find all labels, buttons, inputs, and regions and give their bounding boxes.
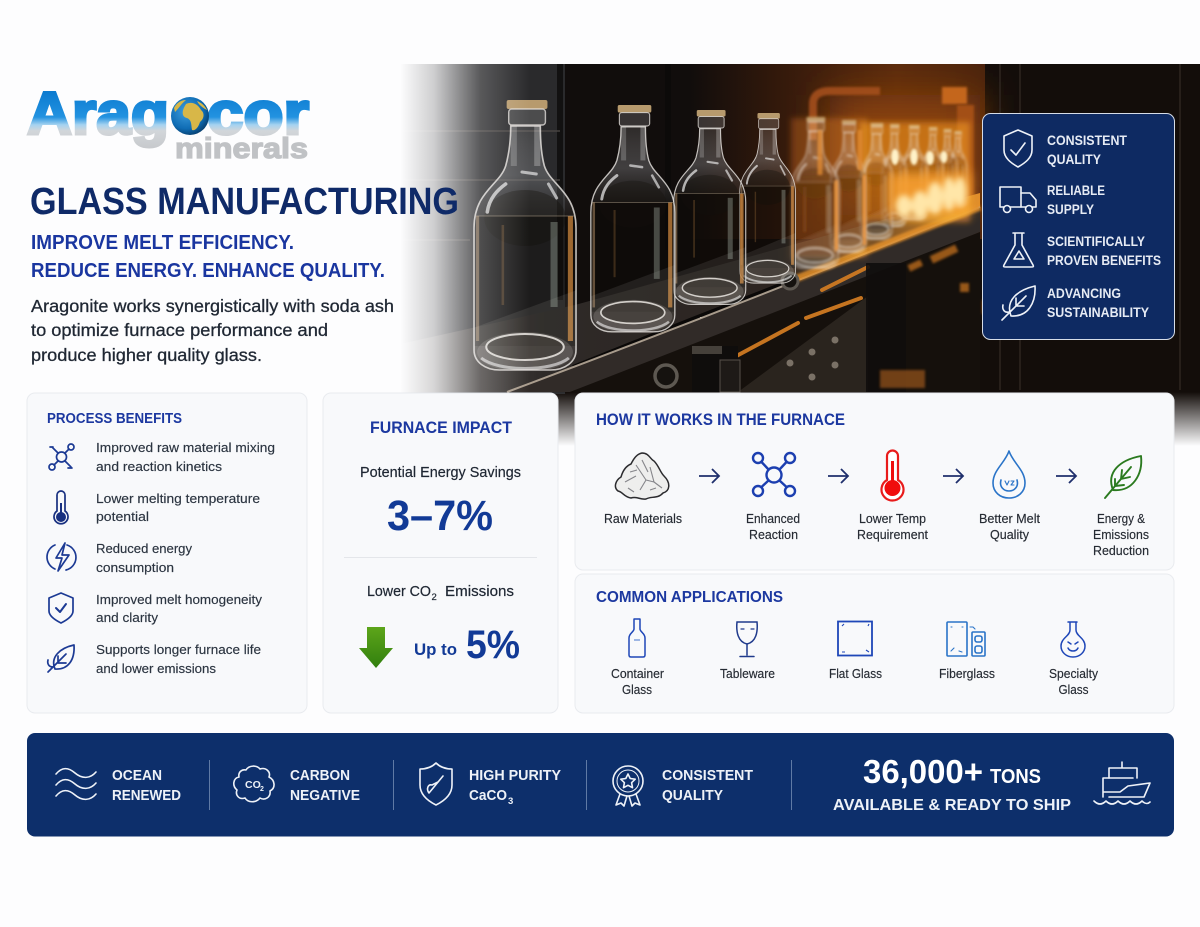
panel: how it works xyxy=(575,393,1174,570)
intro text: to optimize furnace performance and xyxy=(31,320,328,340)
text: carbon negative xyxy=(290,768,360,804)
icon: thermometer xyxy=(54,491,68,524)
text: lower temp xyxy=(857,512,929,542)
label: lower CO2: 2 xyxy=(432,592,437,603)
text: homogeneity: and clarity xyxy=(96,610,159,625)
text: scientifically proven benefits: PROVEN BENEFITS xyxy=(1047,253,1161,268)
text: better melt: Quality xyxy=(990,528,1030,542)
text: melting: potential xyxy=(96,509,149,524)
text: container glass: Glass xyxy=(622,683,652,697)
label: lower CO2 xyxy=(367,584,514,603)
text: high purity: HIGH PURITY xyxy=(469,768,561,784)
icon: leaf xyxy=(48,645,74,672)
heading: how it works: HOW IT WORKS IN THE FURNACE xyxy=(596,411,845,429)
text: tableware: Tableware xyxy=(720,667,775,681)
text: advancing sustainability: ADVANCING xyxy=(1047,286,1121,301)
icon: CO2 cloud: 2 xyxy=(260,786,264,793)
text: energy xyxy=(96,541,192,575)
icon: ship xyxy=(1094,762,1150,804)
icon: fiberglass xyxy=(947,622,985,656)
text: enhanced reaction: Reaction xyxy=(749,528,798,542)
panel: process benefits xyxy=(27,393,307,713)
text: consistent quality: CONSISTENT xyxy=(1047,133,1128,148)
icon: award medal xyxy=(613,766,643,806)
text: high purity: CaCO xyxy=(469,788,507,804)
text: reliable supply xyxy=(1047,183,1105,217)
text: carbon negative: CARBON xyxy=(290,768,350,784)
text: available: AVAILABLE & READY TO SHIP xyxy=(833,797,1071,814)
text: fiberglass: Fiberglass xyxy=(939,667,995,681)
arrow xyxy=(699,469,719,483)
icon: leaf xyxy=(1002,286,1035,320)
icon: red thermometer xyxy=(882,451,904,501)
icon: purity shield xyxy=(420,763,452,805)
intro text: Aragonite works synergistically with soda ash xyxy=(31,296,394,316)
text: homogeneity xyxy=(96,592,263,625)
logo: Aragocor Minerals: minerals xyxy=(175,133,308,165)
icon: green down arrow xyxy=(359,627,393,668)
text: reliable supply: SUPPLY xyxy=(1047,202,1094,217)
far glowing bottles xyxy=(860,123,967,240)
arrow xyxy=(1056,469,1076,483)
stat: 36,000+ tons xyxy=(863,753,1041,790)
text: reliable supply: RELIABLE xyxy=(1047,183,1105,198)
text: melting: Lower melting temperature xyxy=(96,491,260,506)
text: specialty glass: Specialty xyxy=(1049,667,1099,681)
text: consistent quality xyxy=(1047,133,1128,167)
text: consistent quality: QUALITY xyxy=(662,788,723,804)
subtitle xyxy=(31,232,385,282)
text: carbon negative: NEGATIVE xyxy=(290,788,360,804)
subtitle: IMPROVE MELT EFFICIENCY. xyxy=(31,232,294,254)
near bottles xyxy=(473,100,796,372)
text: ocean renewed xyxy=(112,768,181,804)
icon: wine glass xyxy=(737,622,757,656)
icon: bottle xyxy=(629,619,645,657)
stat: 36,000+ tons: TONS xyxy=(990,766,1041,788)
icon: truck xyxy=(1000,187,1036,212)
arrow xyxy=(943,469,963,483)
text: enhanced reaction: Enhanced xyxy=(746,512,800,526)
text: lower temp: Requirement xyxy=(857,528,929,542)
text: energy: consumption xyxy=(96,560,174,575)
text: consistent quality: QUALITY xyxy=(1047,152,1101,167)
icon: melt drop xyxy=(993,451,1025,498)
heading: process benefits: PROCESS BENEFITS xyxy=(47,411,182,427)
icon: flask xyxy=(1004,233,1033,267)
subtitle: REDUCE ENERGY. ENHANCE QUALITY. xyxy=(31,260,385,282)
text: energy reduction xyxy=(1093,512,1149,558)
arrow xyxy=(828,469,848,483)
title: GLASS MANUFACTURING xyxy=(30,181,459,223)
label: up to: Up to xyxy=(414,640,457,659)
text: mixing: and reaction kinetics xyxy=(96,459,223,474)
text: scientifically proven benefits: SCIENTIFICALLY xyxy=(1047,234,1145,249)
logo: Aragocor Minerals: Arag xyxy=(27,80,169,147)
label: lower CO2: Emissions xyxy=(445,584,514,600)
icon: CO2 cloud xyxy=(234,766,274,802)
stat: 3–7%: 3–7% xyxy=(387,492,493,540)
text: specialty glass xyxy=(1049,667,1099,697)
logo: Aragocor Minerals xyxy=(27,80,309,165)
text: high purity: 3 xyxy=(508,796,513,807)
icon: shield check xyxy=(1004,130,1032,167)
text: advancing sustainability xyxy=(1047,286,1149,320)
icon: green leaf xyxy=(1105,456,1141,498)
text: mixing: Improved raw material mixing xyxy=(96,440,275,455)
text: container glass xyxy=(611,667,664,697)
panel: common applications xyxy=(575,574,1174,713)
text: consistent quality xyxy=(662,768,753,804)
icon: energy xyxy=(47,543,76,571)
text: container glass: Container xyxy=(611,667,664,681)
icon: shield xyxy=(49,593,73,623)
label: lower CO2: Lower CO xyxy=(367,584,431,600)
text: specialty glass: Glass xyxy=(1058,683,1088,697)
intro text: produce higher quality glass. xyxy=(31,345,262,365)
text: mixing xyxy=(96,440,275,474)
hero photo: glass bottles on conveyor xyxy=(380,64,1200,450)
stat: 5%: 5% xyxy=(466,623,520,667)
text: energy reduction: Emissions xyxy=(1093,528,1149,542)
text: scientifically proven benefits xyxy=(1047,234,1161,268)
icon: globe xyxy=(171,97,209,135)
icon: flat glass pane xyxy=(838,622,872,656)
icon: waves xyxy=(56,769,96,799)
text: furnace life: and lower emissions xyxy=(96,661,217,676)
icon: molecule xyxy=(49,444,74,470)
heading: furnace impact: FURNACE IMPACT xyxy=(370,418,513,437)
heading: common applications: COMMON APPLICATIONS xyxy=(596,589,783,606)
panel: key promises xyxy=(982,114,1174,340)
text: flat glass: Flat Glass xyxy=(829,667,882,681)
intro text xyxy=(31,296,394,365)
text: energy: Reduced energy xyxy=(96,541,192,556)
text: energy reduction: Reduction xyxy=(1093,544,1149,558)
logo: Aragocor Minerals: cor xyxy=(207,80,309,147)
text: raw materials: Raw Materials xyxy=(604,512,682,526)
icon: network xyxy=(753,453,795,496)
text: melting xyxy=(96,491,260,524)
footer banner xyxy=(27,733,1174,836)
text: advancing sustainability: SUSTAINABILITY xyxy=(1047,305,1149,320)
text: ocean renewed: RENEWED xyxy=(112,788,181,804)
text: furnace life xyxy=(96,642,261,676)
icon: raw materials rock xyxy=(615,453,669,499)
text: homogeneity: Improved melt homogeneity xyxy=(96,592,263,607)
label: energy savings: Potential Energy Savings xyxy=(360,465,521,481)
text: enhanced reaction xyxy=(746,512,800,542)
stat: 36,000+ tons: 36,000+ xyxy=(863,753,983,790)
text: energy reduction: Energy & xyxy=(1097,512,1146,526)
icon: specialty flask xyxy=(1061,622,1085,657)
text: better melt xyxy=(979,512,1041,542)
text: ocean renewed: OCEAN xyxy=(112,768,162,784)
text: better melt: Better Melt xyxy=(979,512,1041,526)
icon: CO2 cloud: CO xyxy=(245,779,261,791)
conveyor belt xyxy=(396,193,987,392)
text: high purity xyxy=(469,768,561,807)
text: consistent quality: CONSISTENT xyxy=(662,768,753,784)
panel: furnace impact xyxy=(323,393,558,713)
text: lower temp: Lower Temp xyxy=(859,512,926,526)
text: furnace life: Supports longer furnace life xyxy=(96,642,261,657)
